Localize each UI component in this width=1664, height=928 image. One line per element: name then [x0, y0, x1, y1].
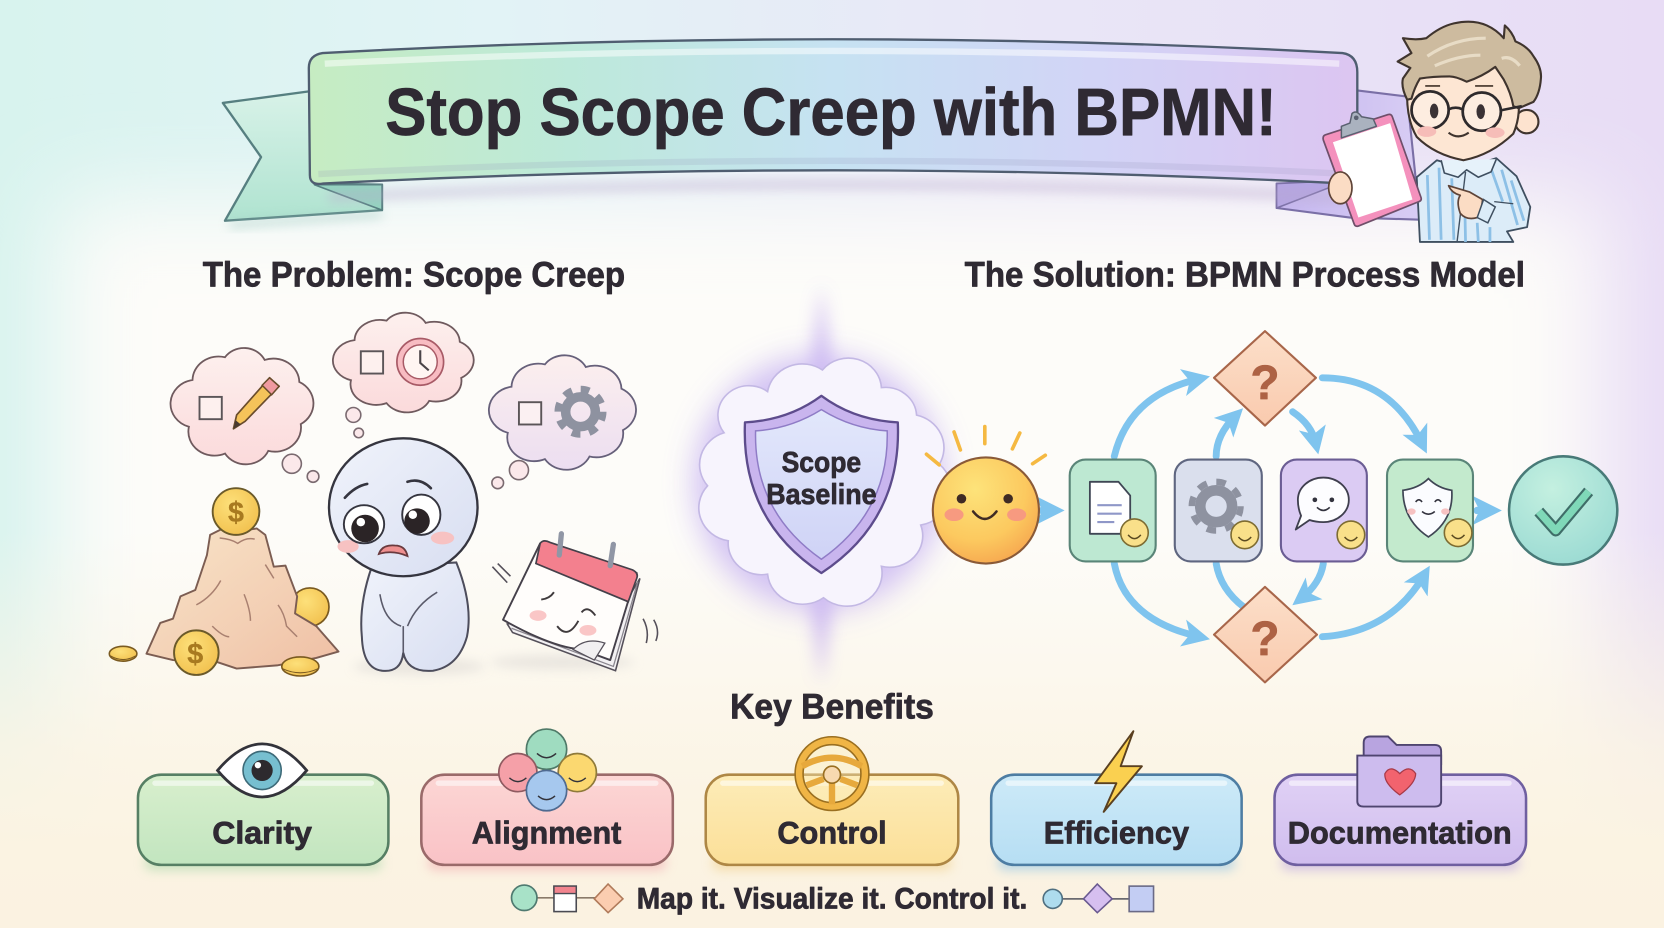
gateway: top: ? — [1250, 357, 1280, 410]
thought cloud: pencil — [171, 348, 313, 464]
sand pile with coins: $ — [187, 638, 203, 670]
gateway: top — [1214, 331, 1316, 426]
sand pile with coins: $ — [228, 497, 244, 529]
clipboard — [1323, 114, 1421, 226]
benefit: documentation — [1275, 736, 1526, 870]
character with clipboard — [1323, 22, 1541, 242]
worried figure — [329, 438, 485, 675]
benefit: efficiency: Efficiency — [1044, 815, 1189, 851]
panel: BPMN process flow — [926, 331, 1617, 682]
heading: solution: The Solution: BPMN Process Model — [965, 256, 1525, 295]
cuff — [1477, 200, 1495, 223]
task: shield — [1387, 460, 1473, 561]
end event: check — [1509, 456, 1617, 565]
benefit: alignment: Alignment — [472, 815, 622, 851]
thought cloud: clock — [333, 313, 474, 412]
ribbon body — [309, 39, 1357, 184]
title: Stop Scope Creep with BPMN! — [385, 75, 1277, 150]
hair — [1398, 22, 1541, 108]
shirt — [1417, 158, 1530, 242]
flow arrows — [1042, 378, 1490, 637]
benefit: clarity — [138, 744, 388, 870]
cloud — [699, 358, 951, 606]
ear — [1515, 110, 1538, 133]
benefit: control: Control — [777, 815, 887, 851]
thought cloud: gear — [489, 355, 636, 470]
face — [1407, 58, 1519, 160]
ribbon right tail — [1277, 90, 1420, 220]
task: gear — [1175, 460, 1262, 561]
benefit: clarity: Clarity — [212, 815, 312, 851]
heading: key benefits: Key Benefits — [730, 687, 934, 726]
benefit: efficiency — [991, 731, 1242, 870]
panel: scope baseline — [694, 284, 951, 684]
task: document — [1070, 460, 1156, 561]
symbols left — [512, 884, 623, 913]
task: chat — [1281, 460, 1367, 561]
heading: problem: The Problem: Scope Creep — [203, 256, 625, 295]
sand pile with coins — [109, 488, 339, 676]
benefit: control — [706, 741, 958, 870]
panel: scope baseline: Baseline — [766, 479, 877, 511]
pointing hand — [1449, 186, 1483, 219]
panel: scope creep illustration — [109, 313, 658, 676]
ribbon left tail — [223, 91, 382, 221]
shield label: Scope — [782, 447, 861, 479]
thought bubbles — [282, 408, 528, 489]
glasses — [1412, 91, 1449, 129]
clipboard hand — [1329, 172, 1352, 204]
shield — [745, 396, 898, 573]
sleeping calendar — [490, 534, 658, 671]
start event: sun — [926, 427, 1045, 564]
gateway: bottom: ? — [1250, 613, 1280, 666]
tagline with BPMN symbols — [512, 882, 1154, 915]
glow — [804, 284, 838, 684]
title ribbon — [223, 39, 1420, 225]
gateway: bottom — [1214, 587, 1317, 682]
benefit: alignment — [421, 729, 673, 870]
tagline text: Map it. Visualize it. Control it. — [637, 882, 1027, 915]
symbols right — [1043, 884, 1154, 913]
benefit: documentation: Documentation — [1288, 815, 1512, 851]
